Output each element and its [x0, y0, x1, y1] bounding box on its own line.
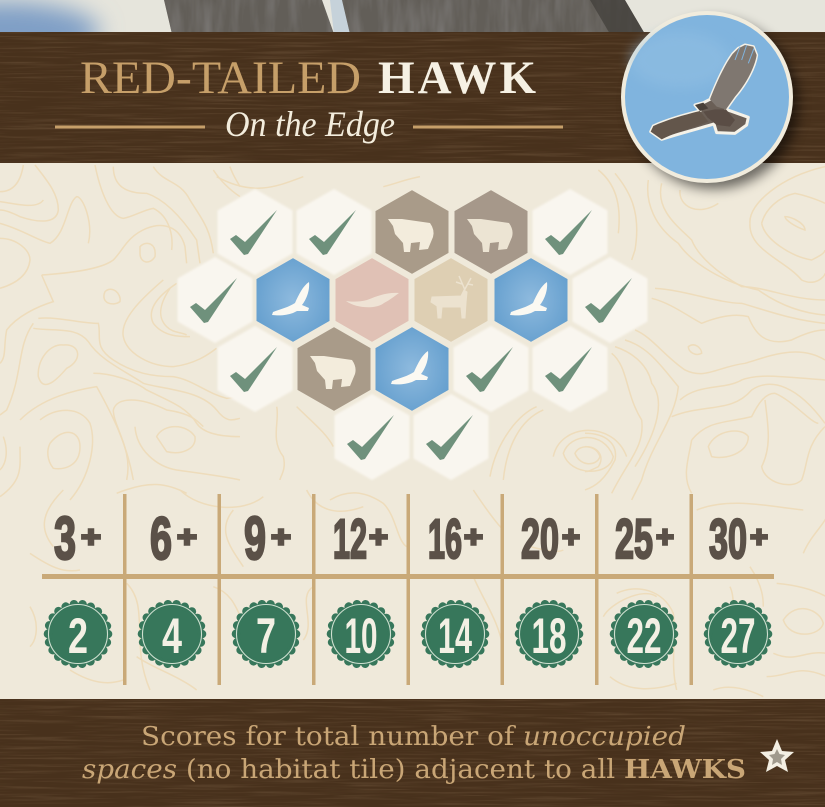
hex: bear [454, 189, 528, 275]
threshold numbers: 20 [521, 507, 559, 570]
hex: bear [296, 326, 372, 412]
threshold numbers: 6 [150, 505, 172, 572]
hex: hawk [374, 326, 450, 412]
badge: 2 points [47, 603, 109, 665]
hex: elk [414, 257, 488, 343]
hex: hawk [494, 257, 568, 343]
badge: 10 points: 10 [344, 608, 378, 664]
panel: header wood band [0, 32, 825, 163]
subtitle with rules [55, 104, 563, 144]
badge: 22 points [613, 603, 675, 665]
title part: red-tailed: RED-TAILED [80, 52, 361, 104]
badge: 7 points: 7 [256, 608, 276, 664]
threshold numbers: + [464, 521, 483, 554]
icon: soaring hawk [651, 45, 757, 139]
title [80, 52, 536, 104]
threshold numbers: 12 [333, 507, 367, 570]
badge: 22 points: 22 [626, 608, 662, 664]
hex: check [572, 257, 648, 343]
hex: check [532, 326, 608, 412]
threshold numbers: + [177, 521, 197, 554]
badge: 2 points: 2 [68, 608, 88, 664]
threshold numbers: + [656, 521, 674, 554]
threshold numbers: + [81, 521, 101, 554]
scoring table grid [42, 494, 774, 685]
background photo: rocks and sky [0, 0, 825, 32]
hex: bear [374, 189, 450, 275]
hex: check [296, 189, 372, 275]
hex: hawk [256, 257, 330, 343]
badge: 4 points: 4 [162, 608, 182, 664]
scoring rule text [82, 722, 746, 785]
hex: check [334, 394, 410, 480]
panel: footer wood band [0, 699, 825, 807]
threshold numbers: 3 [54, 505, 76, 572]
badge: 27 points: 27 [720, 608, 756, 664]
scoring rule text: Scores for total number of unoccupied [141, 722, 686, 752]
badge: 14 points [424, 603, 486, 665]
hex: check [218, 326, 292, 412]
badge: 4 points [141, 603, 203, 665]
threshold numbers: + [562, 521, 580, 554]
badge: 14 points: 14 [438, 608, 472, 664]
badge: 10 points [330, 603, 392, 665]
threshold numbers: + [271, 521, 291, 554]
title part: hawk: HAWK [378, 52, 536, 104]
badge: 18 points [518, 603, 580, 665]
icon: star [760, 739, 794, 772]
badge: 18 points: 18 [532, 608, 566, 664]
threshold numbers: 25 [615, 507, 653, 570]
hex: salmon [334, 257, 410, 343]
score badges [47, 603, 769, 665]
hex: check [218, 189, 292, 275]
hex: check [178, 257, 252, 343]
subtitle with rules: On the Edge [225, 104, 395, 144]
hex: check [532, 189, 608, 275]
threshold numbers: 16 [428, 507, 462, 570]
threshold numbers: 9 [244, 505, 266, 572]
hex: check [414, 394, 488, 480]
threshold numbers: + [369, 521, 388, 554]
medallion: hawk in sky [623, 13, 799, 189]
hex: check [454, 326, 528, 412]
topographic contour lines [0, 165, 825, 697]
threshold numbers: 30 [709, 507, 747, 570]
threshold numbers: + [750, 521, 768, 554]
threshold numbers [54, 505, 768, 572]
badge: 27 points [707, 603, 769, 665]
scoring rule text: spaces (no habitat tile) adjacent to all HAWKS [82, 755, 746, 785]
hex grid [178, 189, 648, 480]
badge: 7 points [235, 603, 297, 665]
